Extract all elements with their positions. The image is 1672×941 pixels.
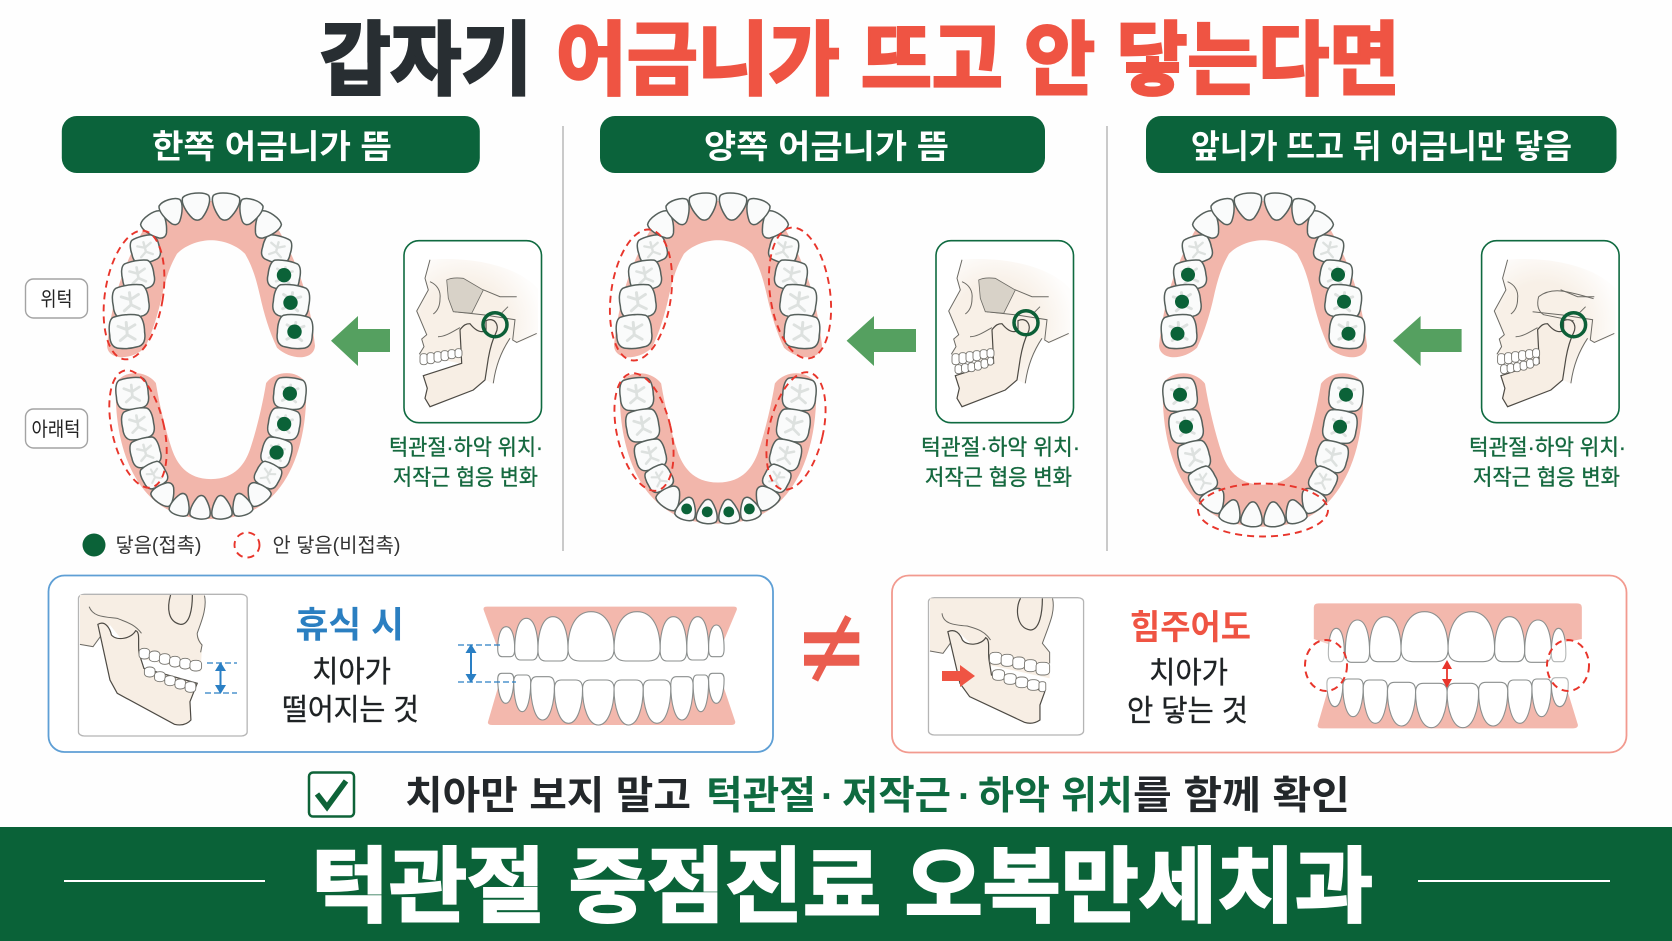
dashed zones: [602, 223, 839, 497]
label: lower jaw: [26, 409, 88, 448]
caption: [1469, 435, 1626, 490]
lower arch: [114, 373, 308, 520]
title: 갑자기: [320, 16, 532, 105]
heading: one side: 한쪽 어금니가 뜸: [152, 128, 392, 165]
skull at rest: [78, 594, 247, 736]
arrow: [847, 316, 916, 366]
text: check reminder: ·: [958, 775, 971, 818]
teeth open at rest: [484, 607, 737, 725]
caption: 저작근 협응 변화: [393, 465, 538, 490]
teeth clenched: [1314, 603, 1582, 728]
clinic name: 턱관절 중점진료 오복만세치과: [311, 842, 1373, 933]
panel: both side molars: [600, 116, 1080, 525]
TMJ skull card: [404, 241, 542, 423]
caption: 저작근 협응 변화: [925, 465, 1072, 490]
heading: front open: 앞니가 뜨고 뒤 어금니만 닿음: [1191, 128, 1572, 165]
text: check reminder: 저작근: [842, 775, 951, 818]
heading: at rest: 휴식 시: [296, 604, 404, 645]
caption: 저작근 협응 변화: [1473, 465, 1620, 490]
lower arch: [618, 373, 818, 525]
heading: both sides: 양쪽 어금니가 뜸: [704, 128, 949, 165]
caption: 턱관절·하악 위치·: [389, 435, 543, 460]
text: check reminder: 하악 위치: [978, 775, 1133, 818]
skull clenched: [928, 598, 1084, 735]
text: teeth not touching: 안 닿는 것: [1127, 695, 1248, 728]
text: check reminder: 턱관절: [706, 775, 816, 818]
divider: [562, 126, 564, 551]
text: check reminder: ·: [821, 775, 834, 818]
lower arch: [1161, 373, 1365, 528]
checklist line: [309, 772, 1350, 818]
caption: 턱관절·하악 위치·: [1469, 435, 1626, 460]
text: check reminder: [405, 775, 1350, 818]
icon: checkbox: [309, 772, 354, 816]
heading: both sides: [600, 116, 1045, 173]
panel: front teeth open: [1146, 116, 1626, 536]
title: 어금니가 뜨고 안 닿는다면: [556, 16, 1400, 105]
gap marker: red: [1442, 660, 1452, 688]
text: check reminder: 를 함께 확인: [1133, 775, 1350, 818]
dashed zone: front: [1198, 484, 1328, 536]
upper arch: [107, 192, 315, 357]
panel: at rest: [48, 576, 773, 752]
gap marker: teeth: [458, 644, 516, 683]
arrow: [331, 316, 390, 366]
heading: clenched: 힘주어도: [1130, 609, 1251, 647]
legend: [82, 532, 400, 558]
heading: one side: [62, 116, 480, 173]
dashed zone: upper left: [95, 226, 173, 364]
TMJ skull card: [936, 241, 1074, 423]
label: upper jaw: [26, 279, 88, 318]
caption: 턱관절·하악 위치·: [921, 435, 1080, 460]
upper arch: [614, 192, 822, 357]
text: teeth not touching: [1127, 657, 1248, 728]
text: teeth apart: [282, 656, 419, 727]
arrow: red jaw arrow: [942, 665, 975, 687]
legend: 닿음(접촉): [116, 534, 202, 557]
heading: front open: [1146, 116, 1616, 173]
label: lower jaw: 아래턱: [32, 418, 80, 441]
panel: clenched: [892, 576, 1626, 752]
arrow: [1393, 316, 1462, 366]
label: upper jaw: 위턱: [40, 288, 72, 311]
text: teeth apart: 떨어지는 것: [282, 694, 419, 727]
footer band: [0, 827, 1672, 941]
not equal sign: [804, 617, 859, 680]
legend: 안 닿음(비접촉): [272, 534, 400, 557]
dashed zones: back teeth: [1305, 640, 1589, 691]
gap marker: skull: [205, 662, 237, 694]
upper arch: [1159, 192, 1367, 357]
text: teeth apart: 치아가: [312, 656, 391, 689]
text: check reminder: 치아만 보지 말고: [405, 775, 691, 818]
panel: one side molars: [26, 116, 543, 558]
TMJ skull card: [1482, 241, 1619, 423]
divider: [1106, 126, 1108, 551]
text: teeth not touching: 치아가: [1149, 657, 1228, 690]
caption: [921, 435, 1080, 490]
dashed zone: lower left: [99, 365, 177, 493]
caption: [389, 435, 543, 490]
